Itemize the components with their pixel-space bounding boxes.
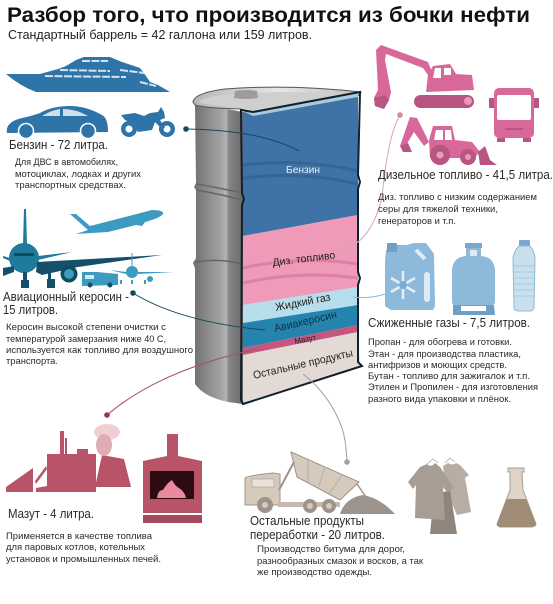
icon: dump truck — [245, 452, 395, 514]
layer: liquid gas — [243, 287, 358, 323]
icon: plastic bottle — [513, 240, 535, 311]
icon: factory — [6, 424, 131, 492]
layer: gasoline — [243, 93, 358, 236]
layer: fuel oil — [243, 325, 358, 355]
title: Разбор того, что производится из бочки нефти — [7, 4, 530, 27]
text: fuel oil: установок и промышленных печей. — [6, 554, 161, 565]
subtitle: Стандартный баррель = 42 галлона или 159 литров. — [8, 28, 312, 42]
text: aviation kerosene: 15 литров. — [3, 302, 58, 317]
layer: diesel — [243, 215, 358, 305]
text: other products: же производство одежды. — [257, 567, 372, 578]
text: liquefied gases: Сжиженные газы - 7,5 литров. — [368, 315, 530, 330]
text: other products: разнообразных смазок и восков, а так — [257, 556, 424, 567]
text: aviation kerosene: Керосин высокой степени очистки с — [6, 322, 166, 333]
icon: clothes on hangers — [408, 458, 471, 534]
icon: car — [7, 106, 108, 138]
icon: plane in flight — [70, 210, 163, 234]
text: fuel oil: для паровых котлов, котельных — [6, 542, 145, 553]
text: fuel oil — [6, 506, 161, 565]
text: diesel: серы для тяжелой техники, — [378, 204, 498, 215]
text: gasoline: транспортных средствах. — [15, 180, 126, 191]
text: aviation kerosene: Авиационный керосин - — [3, 289, 129, 304]
text: diesel — [378, 167, 553, 227]
barrel outline — [241, 92, 362, 404]
layer: other products — [243, 332, 360, 404]
barrel lid — [193, 87, 361, 112]
icon: yacht — [6, 57, 170, 92]
oil barrel: Мазут — [294, 333, 317, 346]
icon: gas cylinder — [452, 243, 495, 315]
text: aviation kerosene: используется как топливо для воздушного — [6, 345, 193, 356]
oil barrel: Жидкий газ — [274, 291, 332, 314]
text: liquefied gases: Бутан - топливо для зажигалок и т.п. — [368, 371, 530, 382]
layer: jet kerosene — [243, 305, 358, 348]
text: aviation kerosene: транспорта. — [6, 356, 58, 367]
oil barrel — [193, 87, 362, 404]
icon: bus — [489, 88, 539, 142]
barrel grey side — [193, 103, 243, 404]
oil barrel: Остальные продукты — [252, 347, 354, 382]
icon: excavator — [374, 45, 474, 109]
barrel labels: Бензин — [286, 164, 320, 176]
oil barrel: Диз. топливо — [272, 249, 336, 269]
text: liquefied gases: антифризов и моющих средств. — [368, 360, 507, 371]
text: liquefied gases — [368, 315, 538, 405]
icon: motorcycle — [121, 107, 175, 137]
icon: backhoe loader — [400, 117, 497, 165]
text: fuel oil: Применяется в качестве топлива — [6, 531, 153, 542]
text: other products: Остальные продукты — [250, 513, 364, 528]
text: gasoline: мотоциклах, лодках и других — [15, 169, 141, 180]
text: aviation kerosene — [3, 289, 193, 367]
text: diesel: Диз. топливо с низким содержанием — [378, 192, 537, 203]
icon: lab flask — [497, 468, 536, 527]
oil barrel: Авиакеросин — [273, 309, 338, 335]
icon: canister — [385, 243, 435, 310]
icon: fuel truck — [82, 272, 118, 288]
text: other products: Производство битума для дорог, — [257, 544, 405, 555]
icon: small plane — [110, 253, 174, 284]
text: liquefied gases: Этилен и Пропилен - для изготовления — [368, 382, 538, 393]
icon: furnace — [143, 434, 202, 523]
text: gasoline — [9, 137, 141, 191]
text: gasoline: Бензин - 72 литра. — [9, 137, 108, 152]
text: aviation kerosene: температурой замерзания ниже 40 С, — [6, 334, 166, 345]
text: liquefied gases: разного вида упаковки и плёнок. — [368, 394, 511, 405]
text: other products: переработки - 20 литров. — [250, 527, 385, 542]
connector lines — [104, 112, 403, 465]
text: liquefied gases: Этан - для производства пластика, — [368, 349, 521, 360]
text: liquefied gases: Пропан - для обогрева и готовки. — [368, 337, 512, 348]
text: gasoline: Для ДВС в автомобилях, — [15, 157, 118, 168]
icon: airliner front view — [3, 209, 162, 288]
text: diesel: генераторов и т.п. — [378, 216, 456, 227]
text: fuel oil: Мазут - 4 литра. — [8, 506, 94, 521]
text: other products — [250, 513, 424, 578]
snowflake — [391, 271, 415, 299]
